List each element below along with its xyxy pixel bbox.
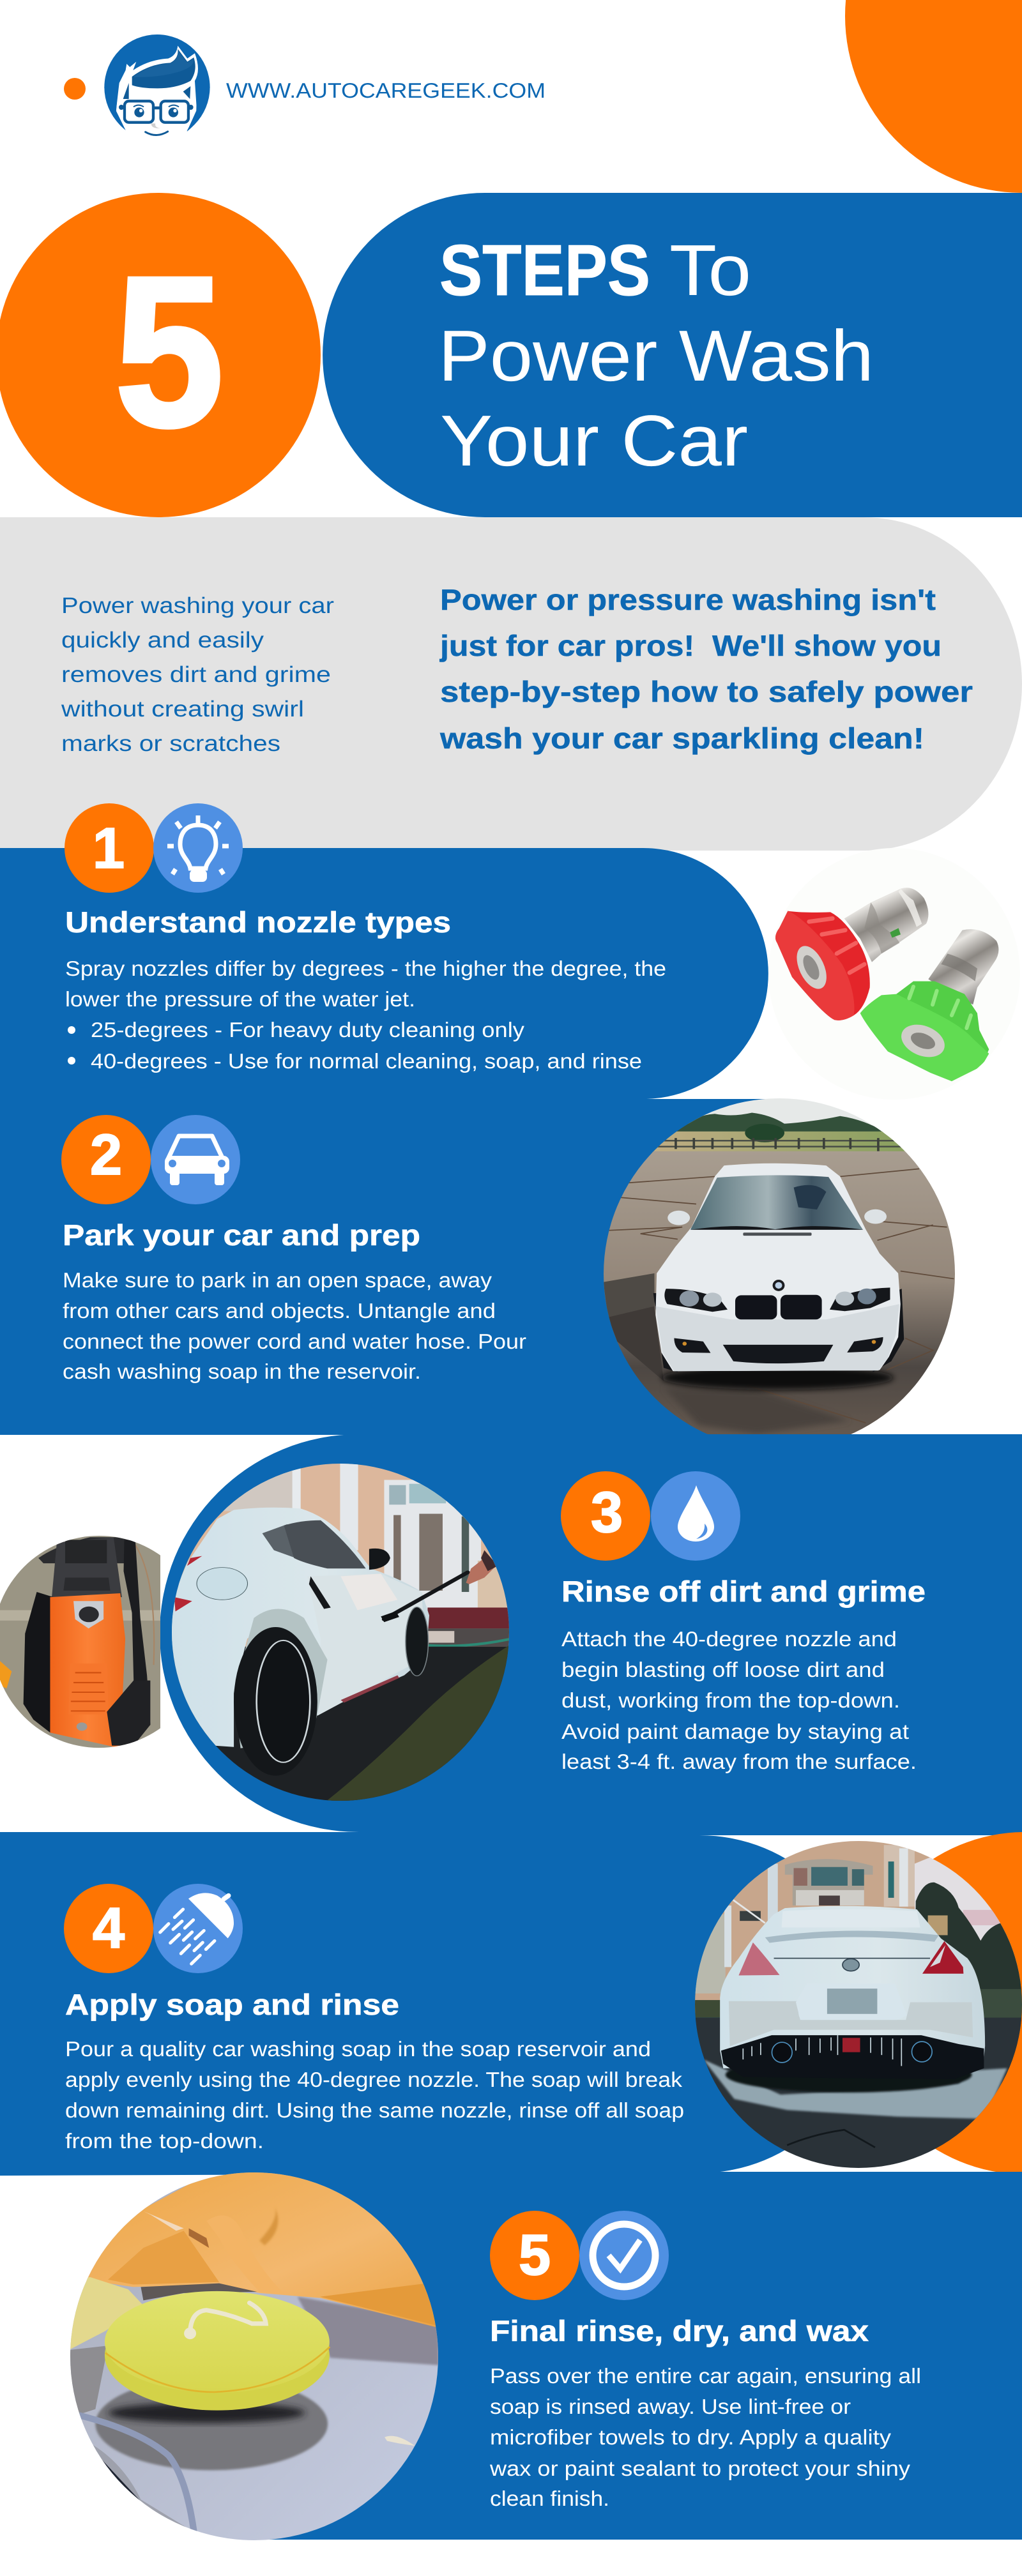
panel: step 4 [0,1826,1022,2176]
body text: lower the pressure of the water jet. [65,987,415,1011]
intro text right bold: just for car pros! We'll show you [439,629,942,662]
photo: white BMW [594,1095,958,1440]
orange circle behind photo [854,1832,1022,2174]
photo: soapy Nissan [690,1826,1022,2172]
heading: Understand nozzle types [65,905,451,939]
website url: WWW.AUTOCAREGEEK.COM [226,79,545,102]
body text: wax or paint sealant to protect your shiny [489,2457,911,2480]
body text: Pass over the entire car again, ensuring all [490,2364,921,2388]
title text: Your Car [440,400,748,481]
panel: step 2 [0,1095,958,1440]
header: logo and website [64,34,545,140]
title pill [323,193,1022,517]
number badge 2: 2 [90,1123,122,1187]
photo: orange pressure washer [0,1529,167,1754]
heading: Park your car and prep [63,1218,420,1252]
big number 5: 5 [115,232,224,471]
intro text right bold: step-by-step how to safely power [440,675,973,708]
photo: red and green nozzles [775,848,999,1082]
icon: shower [153,1884,243,1973]
body text: 40-degrees - Use for normal cleaning, soap, and rinse [91,1049,642,1073]
photo: washing white car [167,1457,518,1808]
number badge 4 [64,1884,153,1973]
body text: Avoid paint damage by staying at [561,1720,909,1743]
body text [65,957,666,1073]
body text [561,1627,917,1773]
intro text right bold [439,583,973,755]
number badge 3 [561,1471,650,1561]
orange dot [64,78,86,100]
body text: microfiber towels to dry. Apply a quality [490,2425,892,2449]
intro text left: marks or scratches [61,731,280,756]
body text [489,2364,921,2510]
body text: Spray nozzles differ by degrees - the higher the degree, the [65,957,666,980]
body text: Pour a quality car washing soap in the soap reservoir and [65,2037,651,2061]
panel: step 1 [0,803,1022,1111]
grey background [0,517,1022,851]
blue band [254,2172,1022,2540]
intro text right bold: Power or pressure washing isn't [440,583,936,616]
title block [0,193,1022,517]
body text [63,1268,526,1383]
blue band [0,1099,786,1435]
body text: from the top-down. [65,2129,264,2153]
intro text left: without creating swirl [61,697,304,722]
body text: soap is rinsed away. Use lint-free or [490,2395,851,2418]
big number circle [0,193,321,517]
body text: from other cars and objects. Untangle and [63,1299,496,1322]
heading: Final rinse, dry, and wax [490,2314,869,2347]
blue band [0,848,768,1099]
number badge 4: 4 [93,1897,125,1960]
number badge 1: 1 [93,817,125,881]
body text: dust, working from the top-down. [561,1688,900,1712]
body text [65,2037,684,2153]
body text: Make sure to park in an open space, away [63,1268,492,1292]
blue band [0,1832,869,2176]
number badge 1 [65,803,154,893]
icon: light bulb [153,803,243,893]
body text: begin blasting off loose dirt and [561,1658,885,1681]
number badge 3: 3 [591,1481,623,1545]
photo: wax sponge and towel [65,2170,444,2543]
intro text left: Power washing your car [61,593,334,618]
icon: check mark [579,2211,669,2300]
number badge 5 [490,2211,579,2300]
icon: car [151,1115,240,1204]
panel: step 3 [0,1434,1022,1835]
title text: Power Wash [438,315,874,396]
body text: clean finish. [490,2487,609,2510]
intro text left: quickly and easily [61,628,264,653]
intro text right bold: wash your car sparkling clean! [439,722,924,755]
body text: 25-degrees - For heavy duty cleaning only [91,1018,525,1042]
title text: To [669,230,751,310]
icon: water drop [651,1471,740,1561]
title text: STEPS [439,230,650,310]
blue band [160,1434,1022,1835]
body text: least 3-4 ft. away from the surface. [561,1750,917,1773]
panel: step 5 [65,2170,1022,2543]
body text: Attach the 40-degree nozzle and [561,1627,897,1651]
body text: down remaining dirt. Using the same nozzle, rinse off all soap [65,2098,684,2122]
heading: Rinse off dirt and grime [561,1575,926,1608]
logo: geek face [104,34,210,140]
body text: connect the power cord and water hose. Pour [63,1330,526,1353]
decorative orange circle top right [845,0,1022,193]
number badge 5: 5 [519,2224,551,2287]
panel: intro [0,517,1022,851]
body text: cash washing soap in the reservoir. [63,1360,421,1383]
heading: Apply soap and rinse [65,1988,399,2021]
intro text left: removes dirt and grime [61,662,331,687]
body text: apply evenly using the 40-degree nozzle. The soap will break [65,2068,683,2091]
intro text left [61,593,334,756]
number badge 2 [61,1115,151,1204]
title text [438,230,874,481]
